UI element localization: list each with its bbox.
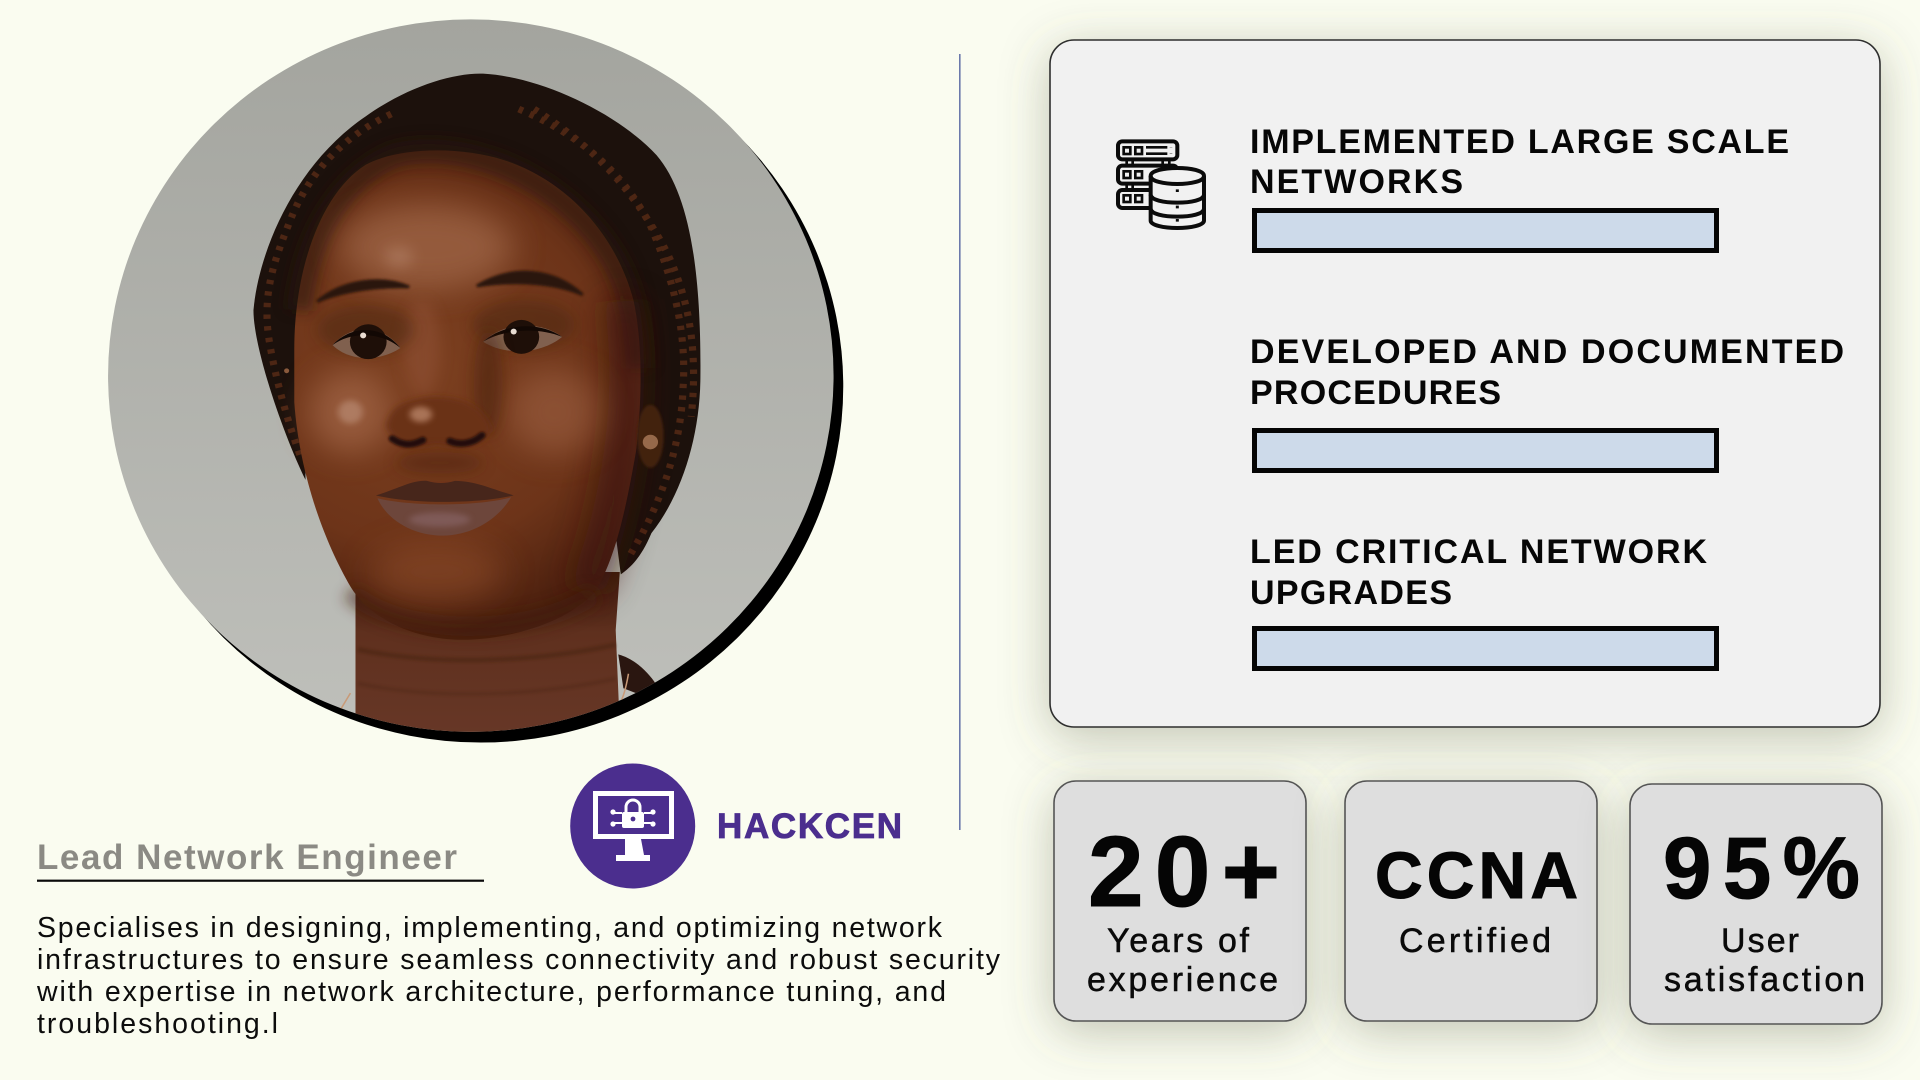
stat card: user satisfaction: User (1721, 922, 1799, 960)
stat card: CCNA certified: Certified (1399, 922, 1551, 960)
item 3: LED CRITICAL NETWORK (1250, 533, 1707, 571)
eye sockets (317, 305, 414, 354)
icon: secure monitor (596, 794, 672, 861)
stat card: CCNA certified (1345, 781, 1597, 1021)
card background (1050, 40, 1880, 727)
highlights (340, 204, 514, 291)
stat card: user satisfaction (1630, 784, 1882, 1024)
stat card: years of experience: Years of (1107, 922, 1250, 960)
stat card: user satisfaction: 95% (1663, 820, 1860, 917)
biography text: troubleshooting.l (37, 1008, 278, 1040)
neck (356, 572, 620, 732)
hairline shadow (299, 151, 639, 368)
eyebrows (317, 281, 409, 301)
stat card: CCNA certified: CCNA (1375, 838, 1578, 912)
mouth (376, 481, 514, 536)
logo wordmark: HACKCEN (717, 807, 902, 846)
stat card: user satisfaction: satisfaction (1664, 961, 1865, 999)
vertical divider (959, 54, 961, 830)
biography text: Specialises in designing, implementing, and optimizing network (37, 912, 943, 944)
jaw shading (350, 591, 595, 626)
item 1 (1250, 123, 1789, 250)
hair (253, 74, 700, 574)
eyes (333, 329, 400, 358)
item 2 (1250, 333, 1844, 470)
nose (474, 330, 502, 436)
biography text: infrastructures to ensure seamless connectivity and robust security (37, 944, 1001, 976)
biography text: with expertise in network architecture, performance tuning, and (36, 976, 946, 1008)
right side shading (585, 301, 627, 591)
stat card: years of experience: experience (1087, 961, 1278, 999)
braids (267, 109, 694, 557)
logo: Hackcen (570, 764, 902, 888)
biography text (36, 912, 1001, 1040)
stat card: years of experience (1054, 781, 1306, 1021)
item 1: NETWORKS (1250, 163, 1463, 201)
stat card: years of experience: 20+ (1088, 816, 1280, 928)
item 1: IMPLEMENTED LARGE SCALE (1250, 123, 1789, 161)
item 2: PROCEDURES (1250, 374, 1501, 412)
job title: Lead Network Engineer (37, 838, 457, 877)
ear and earring (637, 405, 664, 468)
item 3 (1250, 533, 1716, 668)
icon: server and database (1118, 141, 1204, 228)
photo drop shadow (118, 30, 843, 743)
item 3: UPGRADES (1250, 574, 1452, 612)
logo circle (570, 764, 695, 888)
item 2: DEVELOPED AND DOCUMENTED (1250, 333, 1844, 371)
face (294, 150, 641, 640)
portrait photo (100, 15, 845, 776)
panel: achievements (1050, 40, 1880, 727)
